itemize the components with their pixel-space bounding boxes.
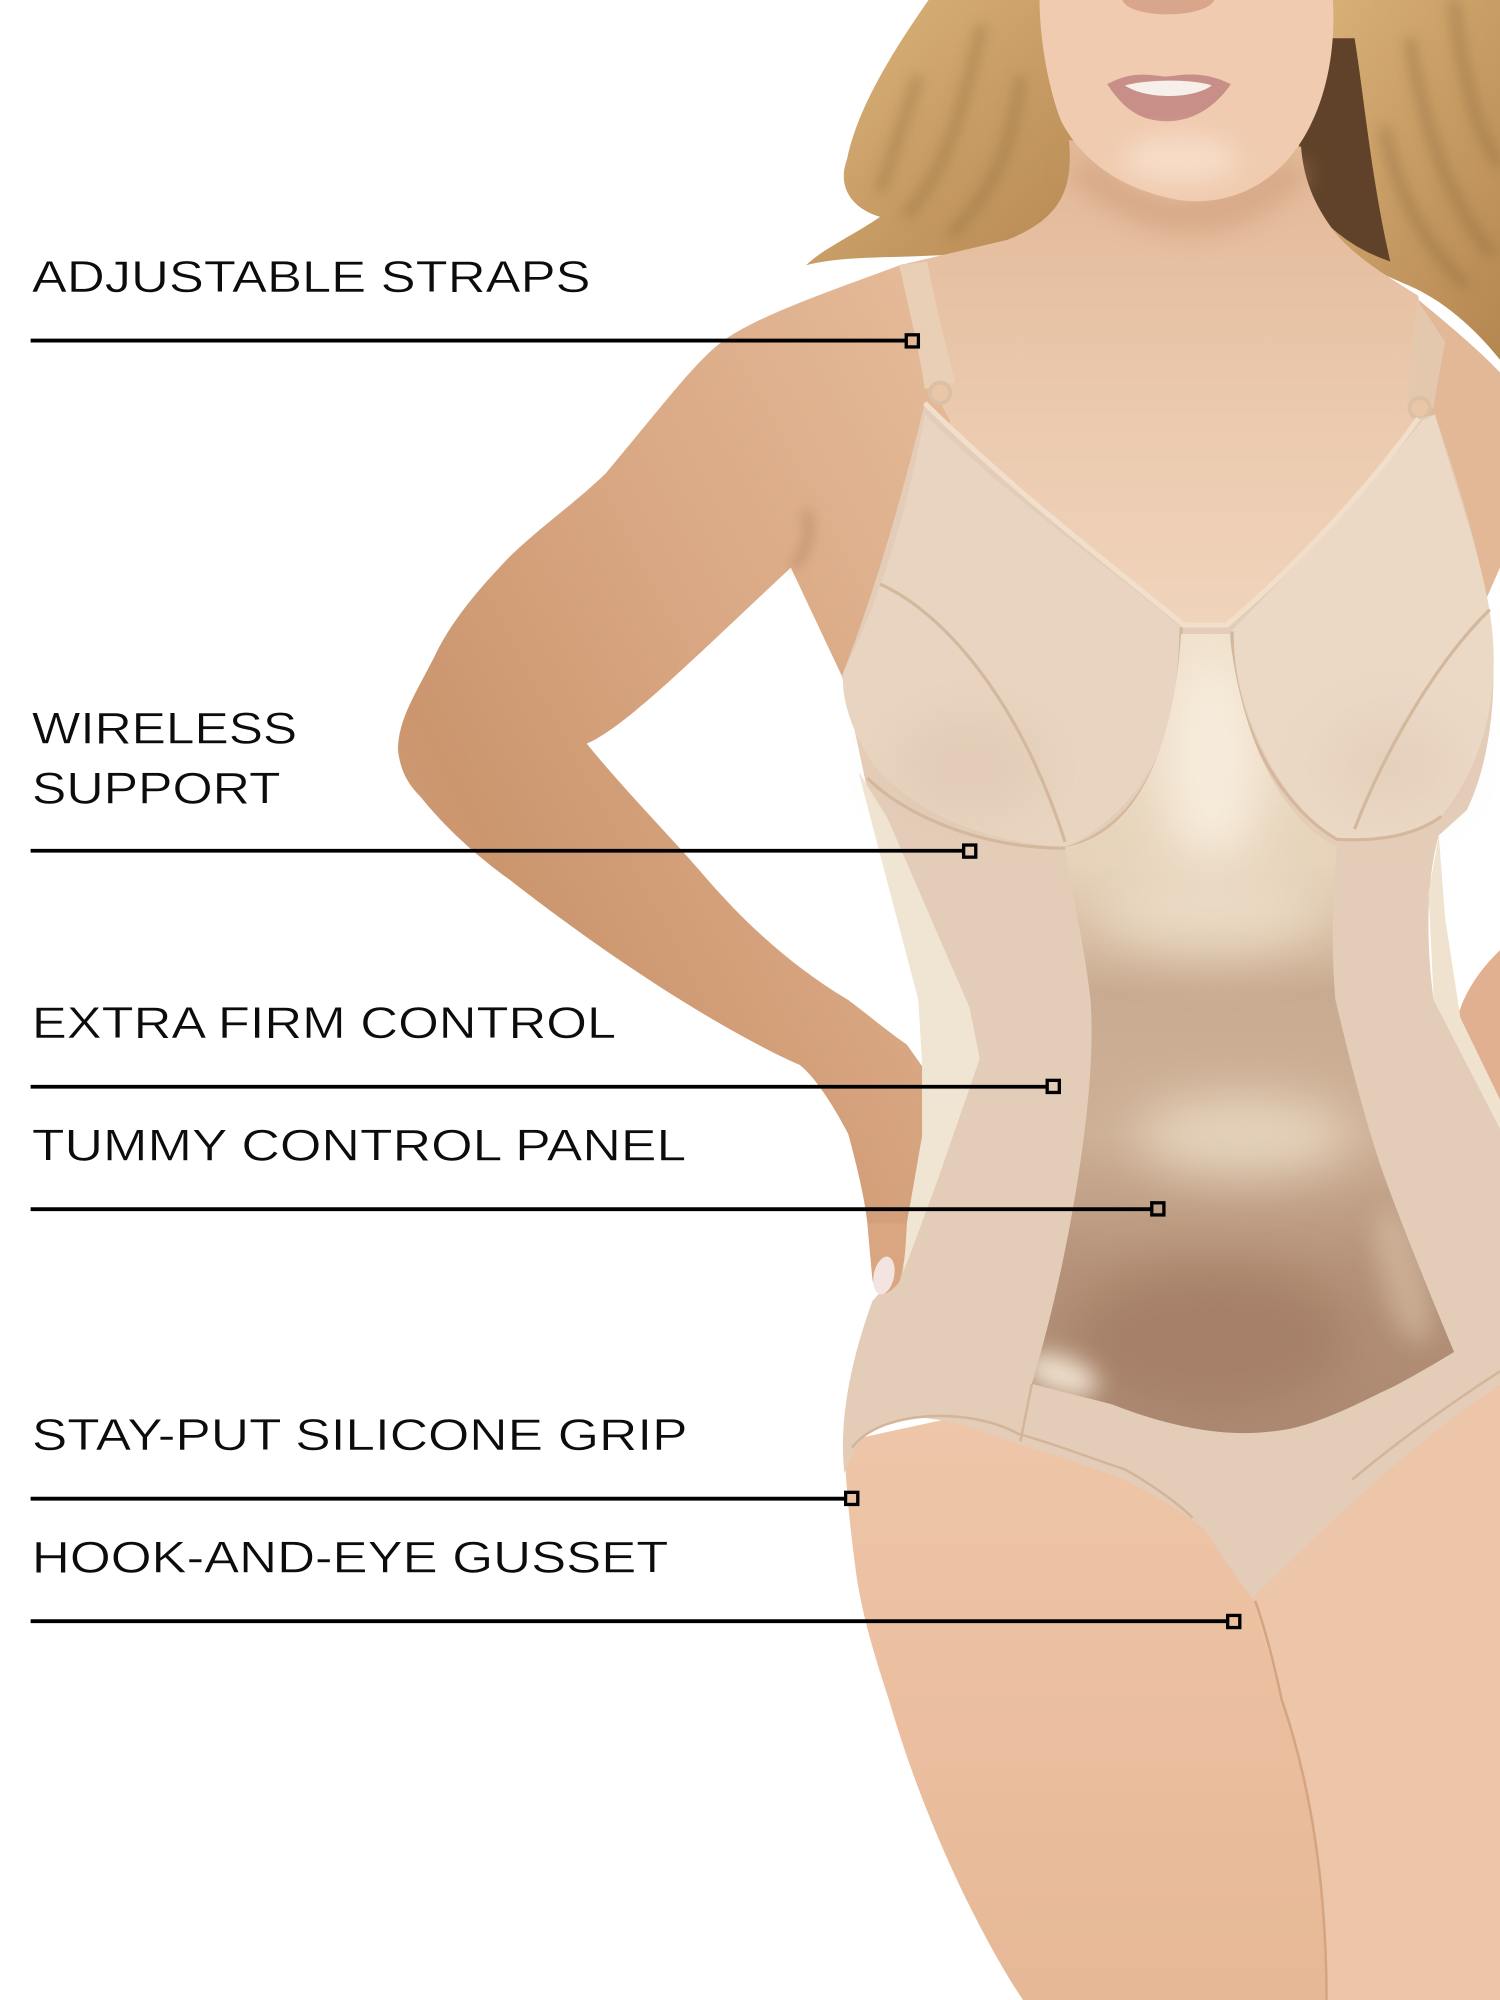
callout: wireless support (31, 705, 976, 857)
model photo illustration (398, 0, 1500, 2000)
bent arm and hand (398, 264, 950, 1294)
neck shadow (1065, 159, 1311, 236)
side seam (1020, 1384, 1032, 1441)
callout: extra firm control: EXTRA FIRM CONTROL (32, 999, 616, 1048)
callout: extra firm control (31, 999, 1059, 1092)
fingertip over garment (867, 1223, 907, 1294)
face (1040, 0, 1333, 201)
cups (843, 415, 1182, 848)
neckline trim (925, 403, 1418, 625)
side lace right (1429, 835, 1500, 1129)
bodysuit (842, 261, 1500, 1598)
callout: wireless support: WIRELESS (32, 705, 297, 754)
callout: adjustable straps: ADJUSTABLE STRAPS (32, 253, 591, 302)
thighs (844, 1384, 1500, 2000)
hair (806, 0, 1500, 360)
neck and chest (893, 140, 1429, 638)
straps (899, 261, 955, 389)
satin tummy panel (1032, 634, 1454, 1434)
callout: hook-and-eye gusset (31, 1534, 1240, 1628)
cup shading (893, 714, 1046, 816)
callout: tummy control panel (31, 1122, 1164, 1215)
fingernail (870, 1255, 898, 1296)
leg trim (852, 1371, 1500, 1518)
callout: hook-and-eye gusset: HOOK-AND-EYE GUSSET (32, 1534, 668, 1583)
callout: stay-put silicone grip (31, 1411, 858, 1504)
armpit shadow (793, 510, 809, 568)
side lace left (858, 772, 980, 1273)
right hand (1458, 950, 1500, 1103)
callout: adjustable straps (31, 253, 918, 347)
main garment (842, 403, 1500, 1598)
cup seams (867, 584, 1490, 848)
callout: stay-put silicone grip: STAY-PUT SILICONE GRIP (32, 1411, 687, 1460)
right arm (1403, 287, 1500, 599)
strap rings (930, 383, 950, 403)
callout: tummy control panel: TUMMY CONTROL PANEL (32, 1122, 686, 1171)
callout: wireless support: SUPPORT (32, 765, 281, 814)
